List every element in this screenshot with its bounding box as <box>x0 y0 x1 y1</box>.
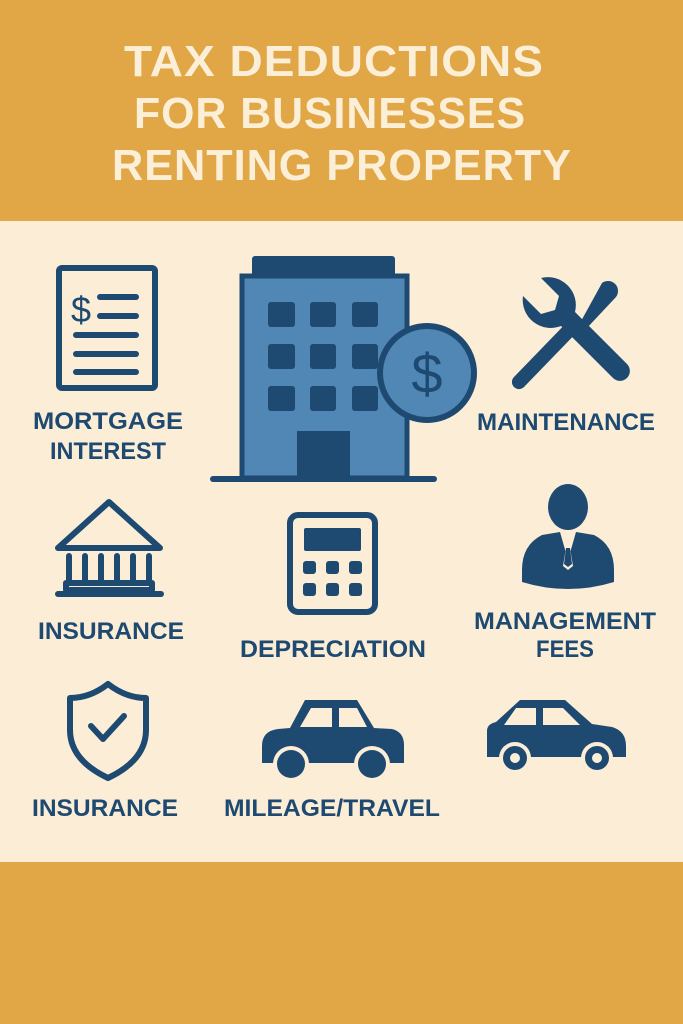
title: RENTING PROPERTY <box>112 141 572 190</box>
title: TAX DEDUCTIONS <box>124 37 544 86</box>
icon: car 2 <box>487 700 626 774</box>
header band <box>0 0 683 221</box>
icon: businessman <box>522 484 614 589</box>
icon: building with coin <box>213 256 474 479</box>
content panel <box>0 221 683 862</box>
label: mortgage interest: MORTGAGE <box>33 408 183 435</box>
label: maintenance: MAINTENANCE <box>477 409 655 436</box>
label: mileage/travel: MILEAGE/TRAVEL <box>224 795 440 822</box>
label: management fees: FEES <box>536 636 594 663</box>
label: mortgage interest: INTEREST <box>50 438 166 465</box>
icon: shield with check <box>70 684 146 778</box>
icon: building with coin: $ <box>411 342 443 405</box>
label: mortgage interest <box>33 408 183 465</box>
icon: car 1 <box>262 700 404 782</box>
label: management fees: MANAGEMENT <box>474 608 656 635</box>
icon: mortgage document: $ <box>71 289 91 330</box>
label: depreciation: DEPRECIATION <box>240 636 426 663</box>
icon: bank <box>58 502 161 594</box>
icon: calculator <box>290 515 375 612</box>
footer band <box>0 862 683 1024</box>
icon: wrench and screwdriver <box>512 277 630 389</box>
label: insurance 1: INSURANCE <box>38 618 184 645</box>
label: insurance 2: INSURANCE <box>32 795 178 822</box>
title: FOR BUSINESSES <box>134 89 526 138</box>
icon: mortgage document <box>59 268 155 388</box>
label: management fees <box>474 608 656 663</box>
title <box>112 37 572 190</box>
